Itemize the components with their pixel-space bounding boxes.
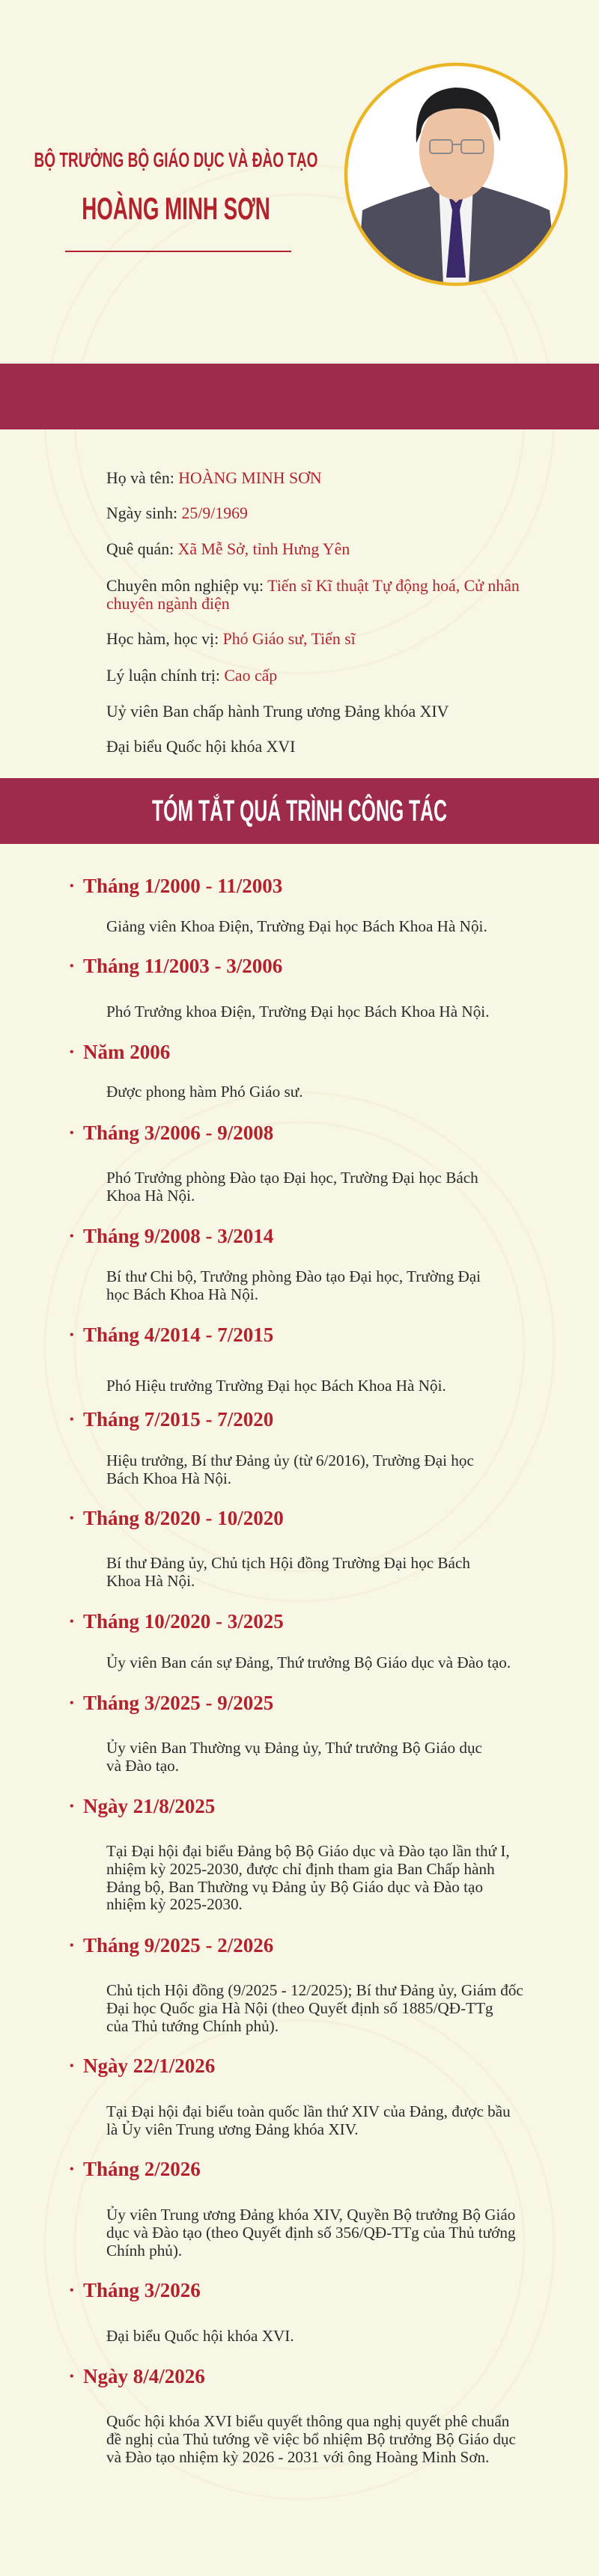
title underline — [65, 251, 291, 252]
panel: career timeline: Đảng bộ, Ban Thường vụ Đảng ủy Bộ Giáo dục và Đào tạo — [106, 1878, 483, 1896]
panel: career timeline: • — [70, 1512, 74, 1525]
panel: career timeline: Tháng 9/2025 - 2/2026 — [83, 1934, 273, 1957]
panel: career timeline: Ủy viên Ban Thường vụ Đảng ủy, Thứ trưởng Bộ Giáo dục — [106, 1739, 482, 1757]
info: national assembly: Đại biểu Quốc hội khóa XVI — [106, 738, 295, 756]
panel: career timeline: và Đào tạo. — [106, 1757, 179, 1775]
info: political theory: Lý luận chính trị: Cao cấp — [106, 667, 277, 685]
panel: career timeline: học Bách Khoa Hà Nội. — [106, 1285, 258, 1303]
portrait photo — [344, 63, 568, 286]
panel: career timeline: và Đào tạo nhiệm kỳ 2026 - 2031 với ông Hoàng Minh Sơn. — [106, 2448, 489, 2466]
panel: career timeline: Bí thư Đảng ủy, Chủ tịch Hội đồng Trường Đại học Bách — [106, 1554, 470, 1572]
panel: career timeline: Bách Khoa Hà Nội. — [106, 1469, 231, 1487]
panel: career timeline: dục và Đào tạo (theo Quyết định số 356/QĐ-TTg của Thủ tướng — [106, 2224, 516, 2242]
panel: career timeline: Tháng 3/2026 — [83, 2279, 201, 2301]
panel: career timeline: • — [70, 880, 74, 893]
panel: career timeline: • — [70, 1046, 74, 1059]
panel: career timeline: • — [70, 1800, 74, 1813]
panel: career timeline: • — [70, 2060, 74, 2072]
info: hometown: Quê quán: Xã Mễ Sở, tỉnh Hưng Yên — [106, 540, 350, 558]
panel: career timeline: Tháng 4/2014 - 7/2015 — [83, 1324, 273, 1346]
panel: career timeline: Khoa Hà Nội. — [106, 1572, 195, 1590]
info: profession: Chuyên môn nghiệp vụ: Tiến sĩ Kĩ thuật Tự động hoá, Cử nhân — [106, 577, 520, 595]
panel: career timeline: Chính phủ). — [106, 2242, 182, 2260]
panel: career timeline: • — [70, 2284, 74, 2297]
panel: career timeline — [70, 875, 523, 2466]
panel: career timeline: Tháng 9/2008 - 3/2014 — [83, 1225, 273, 1247]
panel: career timeline: Phó Hiệu trưởng Trường Đại học Bách Khoa Hà Nội. — [106, 1377, 446, 1395]
title: position: BỘ TRƯỞNG BỘ GIÁO DỤC VÀ ĐÀO TẠO — [34, 148, 317, 171]
panel: career timeline: Ủy viên Trung ương Đảng khóa XIV, Quyền Bộ trưởng Bộ Giáo — [106, 2206, 515, 2224]
panel: career timeline: Chủ tịch Hội đồng (9/2025 - 12/2025); Bí thư Đảng ủy, Giám đốc — [106, 1981, 523, 1999]
panel: career timeline: • — [70, 1413, 74, 1426]
title: name: HOÀNG MINH SƠN — [82, 191, 270, 226]
panel: career timeline: • — [70, 1939, 74, 1952]
info: academic title: Học hàm, học vị: Phó Giáo sư, Tiến sĩ — [106, 630, 356, 648]
info: birth date: Ngày sinh: 25/9/1969 — [106, 504, 248, 522]
panel: career timeline: Đại biểu Quốc hội khóa XVI. — [106, 2327, 294, 2345]
panel: career timeline: Tháng 11/2003 - 3/2006 — [83, 955, 282, 977]
panel: career timeline: Ngày 8/4/2026 — [83, 2365, 205, 2387]
panel: career timeline: nhiệm kỳ 2025-2030. — [106, 1895, 243, 1913]
panel: career timeline: Bí thư Chi bộ, Trưởng phòng Đào tạo Đại học, Trường Đại — [106, 1267, 481, 1285]
panel: career timeline: Tháng 3/2025 - 9/2025 — [83, 1692, 273, 1714]
panel: career timeline: Tại Đại hội đại biểu toàn quốc lần thứ XIV của Đảng, được bầu — [106, 2102, 511, 2120]
panel: career timeline: Phó Trưởng khoa Điện, Trường Đại học Bách Khoa Hà Nội. — [106, 1003, 490, 1021]
info: central committee: Uỷ viên Ban chấp hành Trung ương Đảng khóa XIV — [106, 703, 449, 721]
panel: career timeline: Ủy viên Ban cán sự Đảng, Thứ trưởng Bộ Giáo dục và Đào tạo. — [106, 1653, 511, 1671]
panel: career timeline: Tháng 8/2020 - 10/2020 — [83, 1507, 284, 1529]
panel: career timeline: Đại học Quốc gia Hà Nội (theo Quyết định số 1885/QĐ-TTg — [106, 1999, 493, 2017]
panel: personal info — [106, 468, 520, 756]
panel: career timeline: Hiệu trưởng, Bí thư Đảng ủy (từ 6/2016), Trường Đại học — [106, 1451, 474, 1469]
panel: career timeline: Tháng 2/2026 — [83, 2158, 201, 2180]
panel: career timeline: Năm 2006 — [83, 1041, 170, 1063]
panel: career timeline: Tháng 7/2015 - 7/2020 — [83, 1408, 273, 1431]
panel: career timeline: Giảng viên Khoa Điện, Trường Đại học Bách Khoa Hà Nội. — [106, 917, 487, 935]
panel: career timeline: • — [70, 2370, 74, 2383]
panel: career timeline: nhiệm kỳ 2025-2030, được chỉ định tham gia Ban Chấp hành — [106, 1860, 495, 1878]
panel: career timeline: Phó Trưởng phòng Đào tạo Đại học, Trường Đại học Bách — [106, 1169, 478, 1187]
info: name: Họ và tên: HOÀNG MINH SƠN — [106, 469, 322, 487]
panel: career timeline: Tháng 10/2020 - 3/2025 — [83, 1610, 284, 1633]
panel: career timeline: • — [70, 1127, 74, 1139]
info: profession — [106, 577, 520, 613]
panel: career timeline: Quốc hội khóa XVI biểu quyết thông qua nghị quyết phê chuẩn — [106, 2412, 509, 2430]
panel: career timeline: của Thủ tướng Chính phủ). — [106, 2017, 279, 2035]
panel: career timeline: • — [70, 1329, 74, 1341]
panel: career timeline: là Ủy viên Trung ương Đảng khóa XIV. — [106, 2120, 359, 2138]
panel: career timeline: • — [70, 1615, 74, 1628]
panel: career timeline: Được phong hàm Phó Giáo sư. — [106, 1083, 303, 1101]
panel: career timeline: • — [70, 2163, 74, 2176]
panel: career timeline: Ngày 22/1/2026 — [83, 2055, 215, 2077]
panel: career timeline: Ngày 21/8/2025 — [83, 1795, 215, 1817]
info: profession: chuyên ngành điện — [106, 595, 230, 613]
panel: career timeline: Khoa Hà Nội. — [106, 1187, 195, 1205]
panel: career timeline: Tháng 3/2006 - 9/2008 — [83, 1122, 273, 1144]
panel: career timeline: đề nghị của Thủ tướng về việc bổ nhiệm Bộ trưởng Bộ Giáo dục — [106, 2430, 516, 2448]
section heading band: TÓM TẮT QUÁ TRÌNH CÔNG TÁC — [152, 795, 447, 827]
panel: career timeline: Tháng 1/2000 - 11/2003 — [83, 875, 282, 897]
panel: career timeline: • — [70, 1697, 74, 1710]
panel: career timeline: • — [70, 960, 74, 973]
panel: career timeline: Tại Đại hội đại biểu Đảng bộ Bộ Giáo dục và Đào tạo lần thứ I, — [106, 1842, 510, 1860]
top banner band — [0, 364, 599, 429]
section heading band — [0, 778, 599, 844]
panel: career timeline: • — [70, 1230, 74, 1243]
